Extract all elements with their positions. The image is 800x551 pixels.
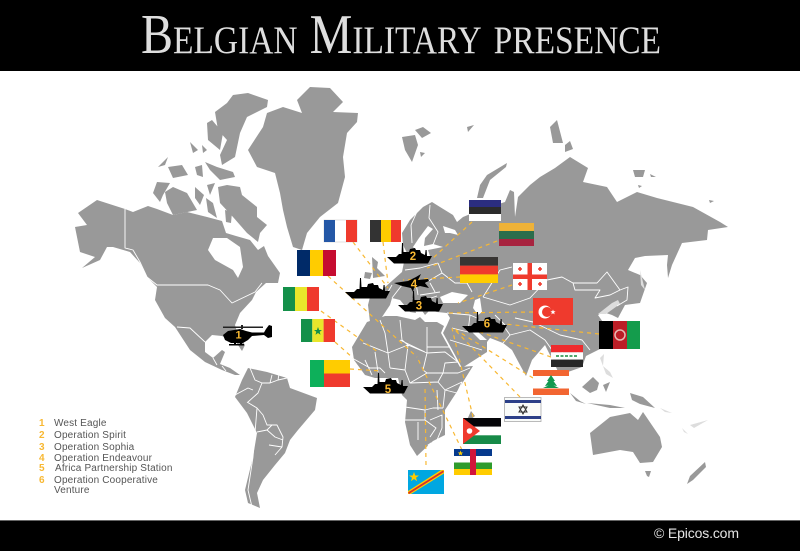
world map — [75, 87, 728, 508]
flag: Central African Republic — [454, 449, 492, 475]
flag: Germany — [460, 257, 498, 283]
ship: Operation Sophia — [398, 291, 443, 312]
credit: © Epicos.com — [654, 525, 739, 541]
landmass: faint islands — [598, 270, 708, 434]
helicopter: West Eagle — [223, 325, 272, 346]
title bar — [0, 0, 800, 71]
landmass: North America — [75, 200, 280, 375]
ship: Africa Partnership Station — [363, 373, 408, 396]
landmass: Southeast Asian islands — [570, 377, 655, 408]
number 4: 4 — [411, 279, 418, 291]
flag: Iraq — [551, 345, 583, 367]
landmass: Madagascar — [466, 411, 475, 422]
landmass: Britain and Ireland — [364, 257, 385, 279]
flag: DR Congo — [408, 470, 444, 494]
aircraft: Operation Endeavour — [394, 274, 429, 292]
footer bar — [0, 520, 800, 551]
landmass: South America — [235, 368, 317, 508]
legend numbers — [39, 418, 45, 486]
legend labels — [54, 418, 173, 496]
flag: Chad — [297, 250, 336, 276]
flag: Georgia — [513, 263, 547, 290]
flag: Jordan — [463, 418, 501, 444]
legend numbers: 3 — [39, 442, 45, 453]
flag: France — [324, 220, 357, 242]
landmass: Africa — [352, 316, 473, 456]
landmass: Greenland — [248, 87, 358, 250]
flag: Lithuania — [499, 223, 534, 246]
legend — [39, 418, 173, 496]
legend numbers: 6 — [39, 475, 45, 486]
number 5: 5 — [385, 384, 392, 396]
ship: Operation Spirit — [387, 243, 432, 264]
flag: Estonia — [469, 200, 501, 221]
seas: Baltic, White, Black, Caspian, Gulf — [412, 226, 487, 340]
landmass: Australia and New Zealand — [590, 412, 706, 484]
number 3: 3 — [416, 300, 422, 312]
legend labels: Operation Sophia — [54, 442, 135, 453]
legend numbers: 4 — [39, 453, 45, 464]
sea: Hudson Bay — [208, 238, 243, 278]
ship: unnumbered — [345, 278, 390, 298]
flag: Lebanon — [533, 370, 569, 395]
legend labels: Venture — [54, 485, 90, 496]
flag: Mali — [283, 287, 319, 311]
number 6: 6 — [484, 318, 490, 330]
flag: Benin — [310, 360, 350, 387]
legend labels: Operation Spirit — [54, 430, 126, 441]
country borders — [125, 205, 628, 507]
landmass: Arctic Russia islands — [402, 120, 714, 203]
flag: Belgium — [370, 220, 401, 242]
flag: Turkey — [533, 298, 573, 325]
flag: Senegal — [301, 319, 335, 342]
legend labels: Africa Partnership Station — [55, 463, 173, 474]
landmass: Arctic Canada — [153, 93, 268, 242]
flag: Afghanistan — [599, 321, 640, 349]
title: Belgian Military presence — [141, 4, 661, 66]
legend numbers: 1 — [39, 418, 45, 429]
number 2: 2 — [410, 251, 416, 263]
legend labels: Operation Endeavour — [54, 453, 153, 464]
legend labels: West Eagle — [54, 418, 107, 429]
legend numbers: 2 — [39, 430, 45, 441]
number 1: 1 — [235, 330, 242, 342]
legend labels: Operation Cooperative — [54, 475, 158, 486]
flag: Israel — [504, 398, 541, 422]
ship: Operation Cooperative Venture — [462, 312, 507, 332]
dashed connector lines — [321, 222, 599, 465]
legend numbers: 5 — [39, 463, 45, 474]
landmass: Eurasia — [368, 157, 728, 398]
